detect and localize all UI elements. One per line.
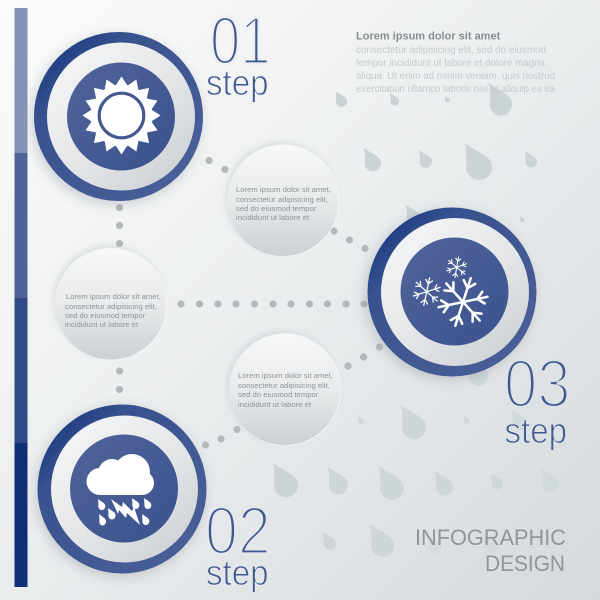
step 2 label: step (206, 554, 269, 593)
intro text block (356, 30, 555, 95)
step 3 label: 03 (504, 345, 571, 422)
intro text block: aliqua. Ut enim ad minim veniam, quis nostrud (356, 71, 555, 82)
connector dots (116, 157, 383, 449)
progress bar (14, 8, 28, 587)
icon: sun (82, 76, 160, 154)
bubble text top: sed do eiusmod tempor (236, 204, 317, 213)
bubble text bottom: incididunt ut labore et (238, 400, 312, 409)
bubble text bottom: Lorem ipsum dolor sit amet, (238, 371, 333, 380)
panel: text bubble bottom (227, 331, 341, 446)
intro text block: exercitation ullamco laboris nisi ut aliquip ex ea (356, 84, 555, 95)
step 3 label: step (504, 412, 567, 451)
title: INFOGRAPHIC (415, 525, 566, 550)
panel: step 2 badge (35, 404, 206, 577)
panel: step 3 badge (364, 208, 536, 380)
bubble text top: Lorem ipsum dolor sit amet, (236, 185, 331, 194)
panel: text bubble left (53, 245, 167, 360)
step 1 label: 01 (210, 3, 271, 79)
title (415, 525, 566, 576)
bubble text left: sed do eiusmod tempor (65, 311, 146, 320)
title: DESIGN (485, 551, 565, 576)
rain drops background (273, 83, 559, 557)
step 1 label: step (206, 64, 269, 103)
bubble text left: incididunt ut labore et (65, 320, 139, 329)
intro text block: Lorem ipsum dolor sit amet (356, 30, 501, 42)
panel: step 1 badge (31, 32, 203, 205)
icon: snowflakes (410, 255, 494, 333)
step 2 label: 02 (205, 492, 271, 569)
bubble text left: Lorem ipsum dolor sit amet, (66, 292, 161, 301)
bubble text top: incididunt ut labore et (236, 213, 310, 222)
icon: storm cloud (86, 454, 154, 525)
panel: text bubble top (225, 142, 339, 256)
bubble text left: consectetur adipisicing elit, (65, 302, 157, 311)
bubble text bottom: consectetur adipisicing elit, (238, 381, 330, 390)
intro text block: consectetur adipisicing elit, sed do eiusmod (356, 45, 546, 56)
intro text block: tempor incididunt ut labore et dolore magna (356, 58, 545, 69)
bubble text top: consectetur adipisicing elit, (236, 195, 328, 204)
bubble text bottom: sed do eiusmod tempor (238, 390, 319, 399)
